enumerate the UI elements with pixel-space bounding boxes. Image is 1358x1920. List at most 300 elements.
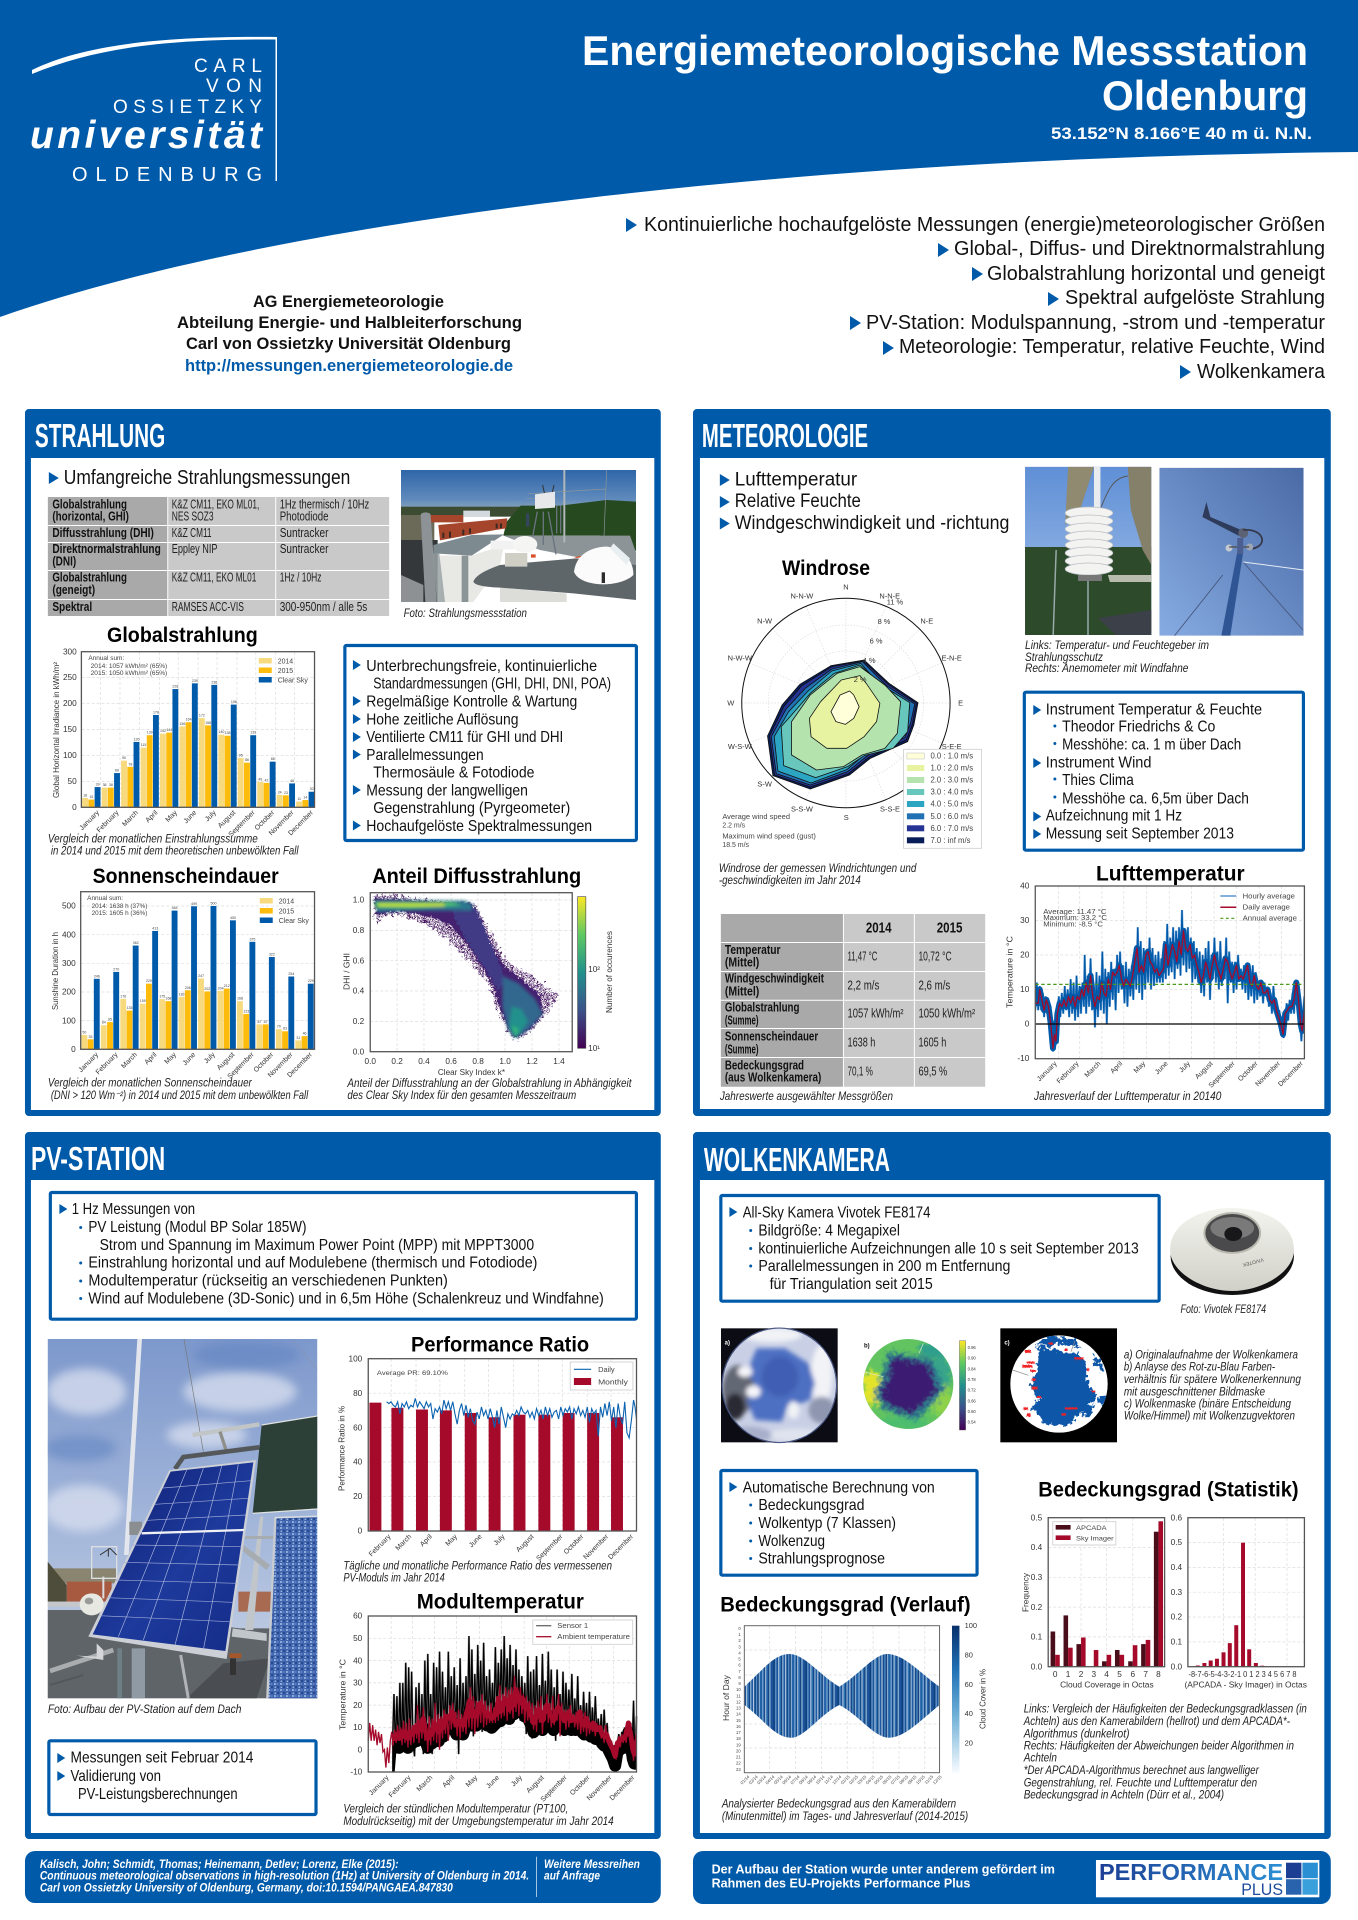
wind rose chart: 2.2 m/s (722, 822, 746, 830)
callout: PV measurements: Einstrahlung horizontal und auf Modulebene (thermisch und Fotodiode) (88, 1255, 537, 1272)
colorbar: image b: 0.54 (968, 1420, 976, 1425)
line chart: Lufttemperatur: October (1237, 1060, 1260, 1083)
table: annual values: (Summe) (725, 1013, 758, 1027)
histogram: cloud coverage frequency: 0.1 (1031, 1633, 1043, 1642)
caption: table: Jahreswerte ausgewählter Messgrößen (719, 1091, 893, 1103)
bar chart: Globalstrahlung: 172 (199, 714, 205, 718)
caption: sky images: Wolke/Himmel) mit Wolkenzugvektoren (1124, 1411, 1295, 1423)
feature list (top right) (626, 214, 1326, 383)
wind rose chart: N-N-W (791, 591, 814, 601)
line chart: Modultemperatur: September (540, 1774, 569, 1804)
logo: Performance Plus: PLUS (1241, 1880, 1283, 1899)
table: annual values: (aus Wolkenkamera) (725, 1071, 821, 1085)
header background (0, 0, 1358, 317)
caption: Sonnenscheindauer (48, 1078, 309, 1102)
histogram: cloud coverage difference: 0.5 (1171, 1538, 1183, 1547)
table: annual values: 2015 (937, 920, 962, 937)
photo: anemometer (1159, 468, 1304, 636)
scatter chart: diffuse fraction: 0.4 (353, 987, 365, 996)
heatmap: cloud cover by day and hour: 17 (736, 1730, 741, 1735)
photo: radiation station (401, 470, 636, 603)
heatmap: cloud cover by day and hour: 09/14 (806, 1774, 818, 1785)
histogram: cloud coverage frequency: 4 (1104, 1670, 1109, 1679)
bar chart: Sonnenscheindauer: 176 (120, 994, 126, 998)
line chart: Lufttemperatur: 20 (1020, 951, 1030, 960)
histogram: cloud coverage difference: 0.4 (1171, 1563, 1183, 1572)
callout: PV measurements: 1 Hz Messungen von (72, 1201, 195, 1218)
callout: instruments: Messung seit September 2013 (1046, 825, 1234, 842)
bar chart: Globalstrahlung: May (165, 809, 179, 824)
logo: Performance Plus: PERFORMANCE (1099, 1859, 1283, 1885)
bar chart: Globalstrahlung: 2014: 1057 kWh/m² (65%) (91, 663, 167, 670)
table: instruments: K&Z CM11 (172, 526, 212, 540)
panel frame (25, 1132, 661, 1839)
heatmap: cloud cover by day and hour: 8 (738, 1675, 741, 1680)
caption: diffuse fraction: Anteil der Diffusstrahlung an der Globalstrahlung in Abhängigkeit (346, 1078, 632, 1090)
wind rose chart: 0.0 : 1.0 m/s (930, 752, 973, 761)
heatmap: cloud cover by day and hour: 60 (965, 1680, 973, 1689)
panel frame (693, 1132, 1331, 1839)
bar chart: Sonnenscheindauer: 63 (283, 1027, 287, 1031)
heatmap: cloud cover by day and hour: 01/15 (840, 1774, 851, 1785)
caption: Modultemperatur: Vergleich der stündlichen Modultemperatur (PT100, (343, 1804, 568, 1816)
feature list (top right): Wolkenkamera (1197, 361, 1326, 383)
line chart: Lufttemperatur: 0 (1025, 1020, 1030, 1029)
callout: Standardmessungen: Hochaufgelöste Spektralmessungen (366, 818, 592, 835)
table: annual values: Bedeckungsgrad (725, 1058, 804, 1072)
wind rose chart: W-S-W (728, 742, 753, 751)
callout: camera specs: für Triangulation seit 2015 (770, 1276, 933, 1293)
heading: Bedeckungsgrad (Verlauf): Bedeckungsgrad (Verlauf) (720, 1594, 971, 1617)
line chart: Modultemperatur: December (609, 1774, 637, 1802)
table: instruments: 1Hz / 10Hz (280, 571, 321, 585)
bar chart: Sonnenscheindauer: January (78, 1051, 100, 1074)
chart: Performance Ratio: 80 (353, 1389, 363, 1398)
heatmap: cloud cover by day and hour: 06/15 (881, 1774, 893, 1785)
footer: citation: auf Anfrage (544, 1869, 600, 1883)
line chart: Modultemperatur: July (510, 1774, 524, 1788)
line chart: Modultemperatur: 50 (353, 1634, 363, 1643)
bar chart: Sonnenscheindauer: 499 (191, 902, 197, 906)
histogram: cloud coverage frequency: 8 (1156, 1670, 1161, 1679)
histogram: cloud coverage frequency: APCADA (1076, 1525, 1107, 1532)
line chart: Lufttemperatur: 10 (1020, 985, 1030, 994)
chart: Performance Ratio: May (445, 1533, 459, 1548)
chart: Performance Ratio: August (515, 1533, 536, 1554)
logo: Universität Oldenburg: CARL (194, 56, 262, 77)
bar chart: Sonnenscheindauer: June (182, 1051, 197, 1067)
caption: PV photo: Foto: Aufbau der PV-Station auf dem Dach (48, 1704, 241, 1716)
heatmap: cloud cover by day and hour: 80 (965, 1650, 973, 1660)
callout: PV measurements: Wind auf Modulebene (3D-Sonic) und in 6,5m Höhe (Schalenkreuz und Windfahne) (88, 1290, 604, 1307)
scatter chart: diffuse fraction: 0.6 (445, 1057, 457, 1066)
bar chart: Sonnenscheindauer: 84 (102, 1021, 106, 1025)
heading: Modultemperatur: Modultemperatur (417, 1590, 584, 1613)
wind rose chart: Maximum wind speed (gust) (722, 833, 816, 841)
histogram: cloud coverage difference: 0.1 (1171, 1638, 1183, 1647)
callout: camera specs: Parallelmessungen in 200 m Entfernung (758, 1258, 1010, 1275)
logo: Universität Oldenburg: VON (206, 76, 262, 97)
heatmap: cloud cover by day and hour: 11 (736, 1693, 741, 1698)
bar chart: Globalstrahlung: December (287, 809, 315, 837)
scatter chart: diffuse fraction: 1.0 (353, 896, 365, 905)
chart: Performance Ratio: July (493, 1533, 507, 1547)
callout: PV measurements (50, 1192, 636, 1319)
wind rose chart: 6 % (870, 636, 883, 646)
chart: Performance Ratio: November (583, 1533, 611, 1561)
wind rose chart: 2.0 : 3.0 m/s (930, 776, 973, 785)
bar chart: Sonnenscheindauer: 322 (269, 952, 275, 957)
line chart: Lufttemperatur: February (1056, 1060, 1081, 1085)
bar chart: Sonnenscheindauer: 87 (264, 1020, 268, 1024)
line chart: Lufttemperatur: Average: 11.47 °C (1043, 908, 1107, 916)
line chart: Lufttemperatur: April (1109, 1060, 1125, 1075)
scatter chart: diffuse fraction: 1.2 (526, 1057, 538, 1066)
bar chart: Sonnenscheindauer: 375 (249, 937, 255, 941)
chart: Performance Ratio: June (468, 1533, 484, 1549)
caption: sky images (1124, 1349, 1301, 1423)
heatmap: cloud cover by day and hour: 10/14 (815, 1774, 826, 1785)
bar chart: Sonnenscheindauer: 50 (82, 1030, 86, 1035)
bar chart: Globalstrahlung: November (268, 809, 296, 837)
table: annual values: Globalstrahlung (725, 1001, 799, 1015)
line chart: Lufttemperatur: December (1277, 1060, 1305, 1088)
bar chart: Sonnenscheindauer: 183 (179, 992, 185, 996)
histogram: cloud coverage frequency: 5 (1117, 1670, 1122, 1679)
heatmap: cloud cover by day and hour: 7 (738, 1669, 741, 1674)
histogram: cloud coverage frequency: 0 (1053, 1670, 1058, 1679)
heatmap: cloud cover by day and hour: 4 (738, 1650, 741, 1656)
table: instruments: (geneigt) (52, 583, 95, 597)
line chart: Modultemperatur: Sensor 1 (557, 1623, 588, 1630)
heatmap: cloud cover by day and hour: 07/14 (789, 1774, 801, 1785)
chart: Performance Ratio: 20 (353, 1492, 363, 1501)
scatter chart: diffuse fraction: 0.2 (353, 1017, 365, 1026)
bullet list: parameters: Lufttemperatur (735, 470, 857, 491)
wind rose chart: 2 % (854, 675, 867, 684)
bar chart: Sonnenscheindauer: 229 (146, 979, 152, 983)
bar chart: Globalstrahlung: 46 (290, 779, 294, 783)
histogram: cloud coverage frequency: 0.5 (1031, 1513, 1043, 1522)
scatter chart: diffuse fraction: 1.4 (553, 1057, 565, 1066)
heatmap: cloud cover by day and hour: 3 (738, 1644, 741, 1649)
heatmap: cloud cover by day and hour: 10/15 (915, 1774, 926, 1785)
table: annual values: 69,5 % (918, 1065, 947, 1079)
bar chart: Sonnenscheindauer: November (267, 1051, 295, 1079)
bar chart: Globalstrahlung: 18 (83, 793, 87, 798)
table: annual values: (Mittel) (725, 984, 759, 998)
table: instruments: NES SOZ3 (172, 509, 214, 524)
table: instruments: Photodiode (280, 509, 329, 524)
bar chart: Globalstrahlung: 228 (172, 684, 178, 689)
line chart: Modultemperatur: 20 (353, 1701, 363, 1710)
callout: automatic calculation: Automatische Berechnung von (743, 1480, 935, 1497)
colorbar: image b: 0.84 (968, 1366, 976, 1371)
colorbar: image b: 0.66 (968, 1398, 976, 1403)
line chart: Lufttemperatur: -10 (1017, 1054, 1030, 1063)
caption: Modultemperatur: Modulrückseitig) mit der Umgebungstemperatur im Jahr 2014 (343, 1816, 614, 1828)
line chart: Modultemperatur: November (586, 1774, 614, 1802)
callout: automatic calculation: Wolkenzug (758, 1533, 825, 1550)
panel: Wolkenkamera (693, 1132, 1331, 1839)
bar chart: Globalstrahlung: 198 (231, 700, 237, 704)
caption: histograms: Achteln (1023, 1753, 1057, 1765)
colorbar: image b (959, 1341, 976, 1430)
bar chart: Globalstrahlung: 0 (72, 803, 77, 812)
wind rose chart: 4.0 : 5.0 m/s (930, 800, 973, 809)
heatmap: cloud cover by day and hour: 01/14 (739, 1774, 751, 1785)
line chart: Modultemperatur: June (485, 1774, 501, 1790)
histogram: cloud coverage frequency: 6 (1130, 1670, 1135, 1679)
bar chart: Globalstrahlung: 2015: 1050 kWh/m² (65%) (91, 670, 167, 677)
heading: Sonnenscheindauer: Sonnenscheindauer (93, 865, 279, 888)
feature list (top right): Global-, Diffus- und Direktnormalstrahlung (954, 238, 1325, 260)
footer: citation: Carl von Ossietzky University of Oldenburg, Germany, doi:10.1594/PANGAEA.847830 (40, 1880, 453, 1894)
heading: Bedeckungsgrad (Statistik): Bedeckungsgrad (Statistik) (1038, 1479, 1299, 1502)
scatter chart: diffuse fraction: 10¹ (588, 1044, 600, 1053)
bar chart: Sonnenscheindauer: 450 (230, 916, 236, 920)
bar chart: Sonnenscheindauer: 202 (204, 987, 210, 991)
logo: Universität Oldenburg (30, 37, 277, 186)
institution block: Carl von Ossietzky Universität Oldenburg (186, 334, 511, 353)
bar chart: Sonnenscheindauer: 175 (159, 995, 165, 999)
line chart: Lufttemperatur: June (1154, 1060, 1170, 1076)
heatmap: cloud cover by day and hour: 12 (736, 1699, 741, 1705)
caption: camera: Foto: Vivotek FE8174 (1181, 1304, 1266, 1316)
bar chart: Sonnenscheindauer: 400 (62, 930, 76, 939)
heading: Performance Ratio: Performance Ratio (411, 1334, 589, 1357)
bar chart: Globalstrahlung: June (183, 809, 198, 825)
callout: instruments: Thies Clima (1062, 772, 1134, 789)
histogram: cloud coverage frequency: Cloud Coverage in Octas (1060, 1680, 1154, 1689)
table: instruments: (DNI) (52, 554, 76, 569)
callout: Standardmessungen: Gegenstrahlung (Pyrgeometer) (373, 800, 570, 817)
histogram: cloud coverage difference: 0.2 (1171, 1613, 1183, 1622)
callout: Standardmessungen: Thermosäule & Fotodiode (373, 764, 535, 782)
line chart: Lufttemperatur: January (1036, 1060, 1059, 1083)
panel frame (693, 409, 1331, 1116)
bullet list: parameters: Windgeschwindigkeit und -richtung (735, 513, 1009, 534)
colorbar: image b: 0.60 (968, 1409, 976, 1414)
line chart: Lufttemperatur: July (1178, 1060, 1192, 1074)
scatter chart: diffuse fraction: 0.6 (353, 956, 365, 965)
table: instruments: Suntracker (280, 526, 328, 540)
chart: Performance Ratio: 60 (353, 1423, 363, 1432)
caption: histograms (1023, 1704, 1307, 1802)
wind rose chart: 11 % (887, 597, 904, 607)
callout: camera specs: Bildgröße: 4 Megapixel (758, 1222, 900, 1239)
wind rose chart: E (958, 698, 963, 708)
caption: Windrose: Windrose der gemessen Windrichtungen und (719, 863, 917, 875)
callout: automatic calculation: Strahlungsprognose (758, 1550, 885, 1567)
caption: Windrose: -geschwindigkeiten im Jahr 2014 (719, 875, 861, 887)
scatter chart: diffuse fraction: 1.0 (499, 1057, 511, 1066)
photo: dome camera (1170, 1208, 1294, 1295)
photo: PV station (43, 1339, 317, 1698)
line chart: Lufttemperatur: November (1254, 1060, 1283, 1088)
chart: Performance Ratio: 40 (353, 1458, 363, 1467)
callout: camera specs: kontinuierliche Aufzeichnungen alle 10 s seit September 2013 (758, 1240, 1139, 1257)
callout: Standardmessungen (345, 646, 636, 840)
logo: Universität Oldenburg: universität (30, 114, 264, 157)
table: annual values: 2014 (866, 920, 892, 937)
caption: Globalstrahlung: in 2014 und 2015 mit dem theoretischen unbewölkten Fall (51, 846, 299, 858)
heatmap: cloud cover by day and hour: 12/15 (932, 1774, 943, 1785)
line chart: Modultemperatur: May (465, 1774, 479, 1789)
bar chart: Globalstrahlung: 115 (141, 743, 146, 747)
table: instruments: Diffusstrahlung (DHI) (52, 526, 154, 540)
bar chart: Sonnenscheindauer: 0 (71, 1045, 76, 1054)
bar chart: Sonnenscheindauer: 123 (243, 1009, 249, 1014)
chart: Performance Ratio: Average PR: 69.10% (377, 1370, 448, 1377)
wind rose chart: N-W-W (728, 653, 753, 663)
wind rose chart: 6.0 : 7.0 m/s (930, 824, 973, 833)
heatmap: cloud cover by day and hour: 19 (736, 1742, 741, 1747)
table: annual values: 1050 kWh/m² (918, 1007, 975, 1021)
bar chart: Sonnenscheindauer: 2014 (279, 898, 294, 906)
caption: sky images: b) Anlayse des Rot-zu-Blau Farben- (1124, 1362, 1275, 1374)
caption: Globalstrahlung (48, 834, 299, 858)
panel: Strahlung (25, 409, 661, 1116)
bar chart: Globalstrahlung: September (228, 809, 257, 839)
bar chart: Globalstrahlung: 88 (271, 757, 275, 761)
line chart: Lufttemperatur: Maximum: 33.2 °C (1043, 914, 1107, 922)
histogram: cloud coverage difference (1171, 1513, 1307, 1689)
institution block: Abteilung Energie- und Halbleiterforschung (177, 313, 522, 332)
panel: Meteorologie (693, 409, 1331, 1116)
wind rose chart: 3.0 : 4.0 m/s (930, 788, 973, 797)
caption: Modultemperatur (343, 1804, 614, 1828)
caption: heatmap: Analysierter Bedeckungsgrad aus den Kamerabildern (721, 1799, 956, 1811)
table: instruments: Eppley NIP (172, 542, 218, 556)
caption: sky images: mit ausgeschnittener Bildmaske (1124, 1386, 1265, 1398)
bar chart: Globalstrahlung: 144 (166, 728, 172, 732)
histogram: cloud coverage frequency: 0.0 (1031, 1662, 1043, 1671)
bar chart: Globalstrahlung: 156 (179, 722, 185, 726)
caption: diffuse fraction: des Clear Sky Index für den gesamten Messzeitraum (347, 1090, 577, 1102)
heatmap: cloud cover by day and hour: 21 (736, 1755, 741, 1760)
callout: instruments: Theodor Friedrichs & Co (1062, 719, 1215, 736)
bar chart: Sonnenscheindauer: March (120, 1051, 139, 1070)
bar chart: Globalstrahlung: 15 (89, 795, 93, 799)
image a: original sky: a) (725, 1341, 730, 1347)
bar chart: Globalstrahlung: 11 (297, 797, 301, 801)
histogram: cloud coverage difference: (APCADA - Sky Imager) in Octas (1185, 1680, 1307, 1689)
bar chart: Globalstrahlung: 300 (63, 647, 77, 657)
bar chart: Sonnenscheindauer: 168 (237, 997, 243, 1001)
bar chart: Globalstrahlung: 100 (63, 751, 77, 760)
caption: sensors: Rechts: Anemometer mit Windfahne (1025, 663, 1188, 675)
bar chart: Globalstrahlung: 138 (225, 731, 231, 735)
bar chart: Globalstrahlung (52, 647, 315, 839)
institution block: http://messungen.energiemeteorologie.de (185, 356, 513, 375)
caption: Performance Ratio: PV-Moduls im Jahr 2014 (343, 1573, 445, 1585)
colorbar: image b: 0.72 (968, 1388, 976, 1393)
footer: citation: Continuous meteorological observations in high-resolution (1Hz) at University of Oldenburg in 2014. (40, 1869, 529, 1883)
callout: automatic calculation: Wolkentyp (7 Klassen) (758, 1515, 896, 1532)
heading: Anteil Diffusstrahlung: Anteil Diffusstrahlung (372, 865, 581, 888)
table: annual values: 70,1 % (848, 1065, 873, 1079)
line chart: Lufttemperatur: May (1133, 1060, 1147, 1075)
bar chart: Globalstrahlung: 39 (96, 783, 100, 787)
bar chart: Sonnenscheindauer: 362 (133, 941, 139, 945)
footer: citation: Kalisch, John; Schmidt, Thomas; Heinemann, Detlev; Lorenz, Elke (2015): (40, 1857, 399, 1871)
bar chart: Sonnenscheindauer: 413 (152, 926, 158, 930)
table: annual values: 11,47 °C (848, 950, 877, 964)
bar chart: Globalstrahlung: 14 (303, 795, 307, 800)
logo: Universität Oldenburg: OLDENBURG (72, 164, 262, 186)
wind rose chart: 5.0 : 6.0 m/s (930, 812, 973, 821)
heatmap: cloud cover by day and hour: 10 (736, 1687, 741, 1692)
bar chart: Sonnenscheindauer: 206 (185, 986, 191, 990)
bar chart: Globalstrahlung: 158 (205, 721, 211, 725)
heatmap: cloud cover by day and hour: 9 (738, 1681, 741, 1686)
table: instruments: Direktnormalstrahlung (52, 542, 161, 556)
line chart: Lufttemperatur: Minimum: -8.5 °C (1043, 920, 1103, 929)
bar chart: Sonnenscheindauer: 2014: 1638 h (37%) (92, 903, 147, 910)
bar chart: Globalstrahlung: 239 (192, 679, 198, 683)
caption: Sonnenscheindauer: Vergleich der monatlichen Sonnenscheindauer (48, 1078, 253, 1090)
institution block: AG Energiemeteorologie (253, 292, 444, 311)
photo: dome camera: VIVOTEK (1241, 1256, 1264, 1268)
wind rose chart: N-E (920, 616, 933, 626)
callout: instruments: Instrument Temperatur & Feuchte (1046, 701, 1262, 718)
bar chart: Globalstrahlung: 66 (115, 769, 119, 773)
line chart: Lufttemperatur: March (1084, 1060, 1102, 1079)
bar chart: Globalstrahlung: 236 (211, 680, 217, 684)
heading: WOLKENKAMERA (704, 1141, 890, 1178)
callout: Standardmessungen: Messung der langwelligen (366, 782, 528, 800)
feature list (top right): Globalstrahlung horizontal und geneigt (987, 263, 1325, 285)
bar chart: Sonnenscheindauer: 500 (211, 901, 217, 906)
wind rose chart: 4 % (863, 656, 876, 665)
table: annual values: 1057 kWh/m² (848, 1007, 904, 1021)
histogram: cloud coverage difference: 0.6 (1171, 1513, 1183, 1522)
title: Oldenburg (1102, 72, 1308, 119)
line chart: Modultemperatur: April (441, 1774, 457, 1789)
bar chart: Sonnenscheindauer: 31 (296, 1036, 300, 1040)
heatmap: cloud cover by day and hour: 40 (965, 1709, 973, 1718)
title: Energiemeteorologische Messstation (582, 27, 1308, 74)
bar chart: Globalstrahlung: 38 (109, 783, 113, 787)
bar chart: Sonnenscheindauer (51, 892, 315, 1081)
feature list (top right): Meteorologie: Temperatur, relative Feuchte, Wind (899, 336, 1325, 358)
callout: instruments: Messhöhe: ca. 1 m über Dach (1062, 736, 1241, 753)
line chart: Modultemperatur: January (368, 1774, 391, 1797)
chart: Performance Ratio: December (607, 1533, 635, 1561)
image a: original sky (721, 1328, 838, 1443)
caption: histograms: Rechts: Häufigkeiten der Abweichungen beider Algorithmen in (1024, 1741, 1294, 1753)
wind rose chart: 7.0 : inf m/s (930, 836, 971, 845)
line chart: Lufttemperatur: 30 (1020, 916, 1030, 925)
heatmap: cloud cover by day and hour: 12/14 (831, 1774, 843, 1785)
scatter chart: diffuse fraction: 0.0 (353, 1047, 365, 1057)
bar chart: Globalstrahlung: 150 (63, 725, 77, 734)
chart: Performance Ratio: Monthly (598, 1377, 628, 1387)
table: instruments: 1Hz thermisch / 10Hz (280, 497, 369, 512)
bullet list: parameters (720, 470, 1009, 534)
caption: Performance Ratio: Tägliche und monatliche Performance Ratio des vermessenen (343, 1560, 612, 1572)
histogram: cloud coverage frequency: Frequency (1021, 1572, 1030, 1612)
photo: temperature sensor (1025, 467, 1151, 635)
table: annual values: (Summe) (725, 1042, 758, 1056)
histogram: cloud coverage frequency: 0.2 (1031, 1603, 1043, 1612)
line chart: Modultemperatur: 0 (358, 1745, 363, 1754)
footer: funding (693, 1851, 1331, 1904)
line chart: Modultemperatur: 60 (353, 1612, 363, 1621)
bar chart: Globalstrahlung: April (145, 809, 160, 824)
image c: cloud mask (1000, 1328, 1117, 1442)
